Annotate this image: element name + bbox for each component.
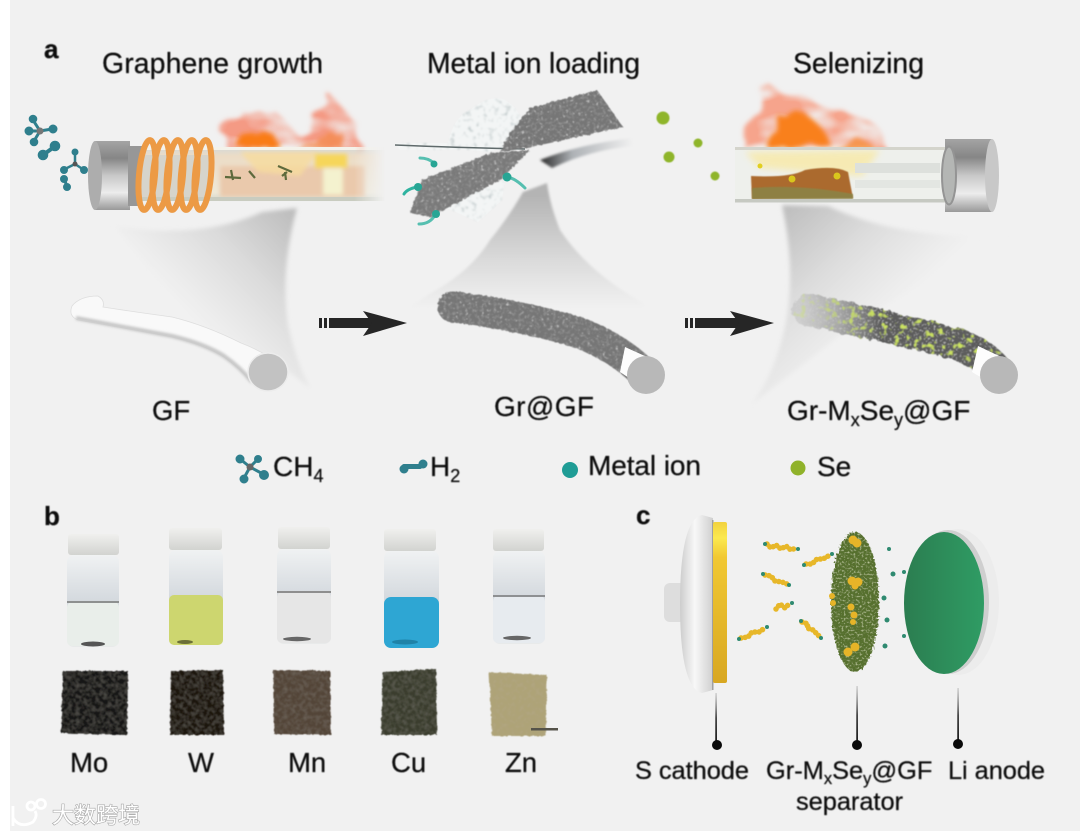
Gr-MxSey@GF separator (829, 532, 879, 672)
leader: separator (852, 686, 862, 750)
label: Gr-MxSey@GF separator: x (824, 770, 833, 788)
small molecules in tube (225, 166, 292, 180)
panel c: battery schematic (635, 500, 1045, 816)
lithium end beads (737, 542, 834, 641)
leader: S cathode (712, 693, 722, 750)
icon: flame over second tube (745, 84, 885, 152)
vial: Mn (277, 527, 331, 644)
heading: Metal ion loading: Metal ion loading (427, 48, 640, 80)
GF white strand (71, 296, 288, 391)
label: Gr-MxSey@GF: x (851, 410, 860, 430)
leader: Li anode (953, 688, 963, 749)
legend icon: Se (790, 460, 806, 476)
icon: flame over first tube (220, 95, 358, 148)
panel b: metal salt solutions and fabrics (44, 501, 558, 778)
vial: Mo (67, 534, 119, 647)
icon: selenium particles (656, 112, 720, 180)
legend text: CH4: 4 (313, 466, 323, 486)
metal ions (404, 158, 525, 224)
label: W: W (188, 747, 214, 778)
label: Gr-MxSey@GF: @GF (903, 395, 970, 426)
legend text: Metal ion: Metal ion (588, 450, 701, 481)
label: Li anode: Li anode (948, 757, 1045, 785)
label: Gr-MxSey@GF separator: Gr-M (766, 757, 824, 785)
fibre: Zn stray (531, 728, 558, 730)
heading: Selenizing: Selenizing (793, 48, 924, 80)
foam ribbon lower (410, 150, 530, 217)
vial: Zn (493, 529, 545, 644)
label: Gr-MxSey@GF: y (894, 410, 903, 430)
orange coil (136, 139, 214, 211)
legend icon: H2 (400, 460, 428, 474)
watermark (13, 800, 140, 828)
brown sample (751, 168, 853, 199)
Li ions (882, 547, 906, 648)
legend text: H2: H (430, 451, 450, 482)
polysulfide chains (737, 542, 834, 641)
label: Cu: Cu (391, 747, 426, 778)
label: GF: GF (152, 395, 190, 426)
tube end cap (95, 141, 130, 210)
label: S cathode: S cathode (635, 757, 749, 785)
label: Mn: Mn (288, 747, 326, 778)
label: Gr-MxSey@GF separator (766, 757, 932, 816)
panel label a: a (44, 34, 59, 64)
sulfur beads (741, 544, 830, 638)
panel a: synthesis process (26, 34, 1018, 486)
vial: W (169, 528, 223, 645)
Gr-MxSey@GF strand (808, 310, 1018, 394)
label: Gr-MxSey@GF separator: Se (832, 757, 863, 785)
legend text: H2: 2 (450, 466, 460, 486)
funnel shadow: loading to Gr@GF (405, 183, 650, 318)
label: Mo: Mo (70, 747, 108, 778)
S cathode disk (664, 515, 727, 693)
icon: foam in metal ion solution (395, 90, 633, 224)
Li anode disk (904, 529, 999, 675)
swatch: Cu (381, 669, 437, 735)
watermark logo (13, 800, 46, 826)
tube glass (130, 147, 385, 201)
icon: gas molecules (26, 116, 86, 190)
label: Gr-MxSey@GF separator: separator (796, 788, 904, 816)
Gr@GF strand (453, 307, 665, 394)
funnel shadow: growth to GF (115, 208, 310, 388)
label: Gr@GF: Gr@GF (494, 391, 594, 422)
icon: selenizing tube (735, 139, 999, 212)
funnel shadow: selenizing to product (752, 205, 1005, 404)
arrow 2 (685, 311, 774, 336)
label: Gr-MxSey@GF separator: y (863, 770, 872, 788)
arrow 1 (319, 311, 407, 336)
label: Gr-MxSey@GF: Gr-M (787, 395, 851, 426)
panel label b: b (44, 501, 60, 531)
label: Zn: Zn (505, 747, 537, 778)
legend text: CH4: CH (273, 451, 313, 482)
tube end cap (945, 139, 992, 212)
vial: Cu (384, 529, 439, 648)
water splash (395, 98, 525, 222)
legend text: Se: Se (817, 451, 851, 482)
label: Gr-MxSey@GF: Se (860, 395, 894, 426)
panel label c: c (636, 500, 650, 530)
heading: Graphene growth: Graphene growth (102, 48, 323, 80)
foam ribbon upper (500, 90, 623, 152)
swatch: Mo (61, 671, 128, 735)
legend (237, 450, 851, 486)
swatch: Mn (273, 670, 331, 735)
legend icon: metal ion (562, 462, 578, 478)
legend icon: CH4 (237, 456, 268, 482)
watermark text: 大数跨境 (52, 803, 140, 828)
coil interior (140, 155, 210, 197)
swatch: W (170, 670, 224, 735)
icon: heated tube with coil (88, 139, 385, 211)
swatch: Zn (489, 672, 547, 736)
label: Gr-MxSey@GF separator: @GF (871, 757, 932, 785)
silver water surface (540, 138, 633, 168)
